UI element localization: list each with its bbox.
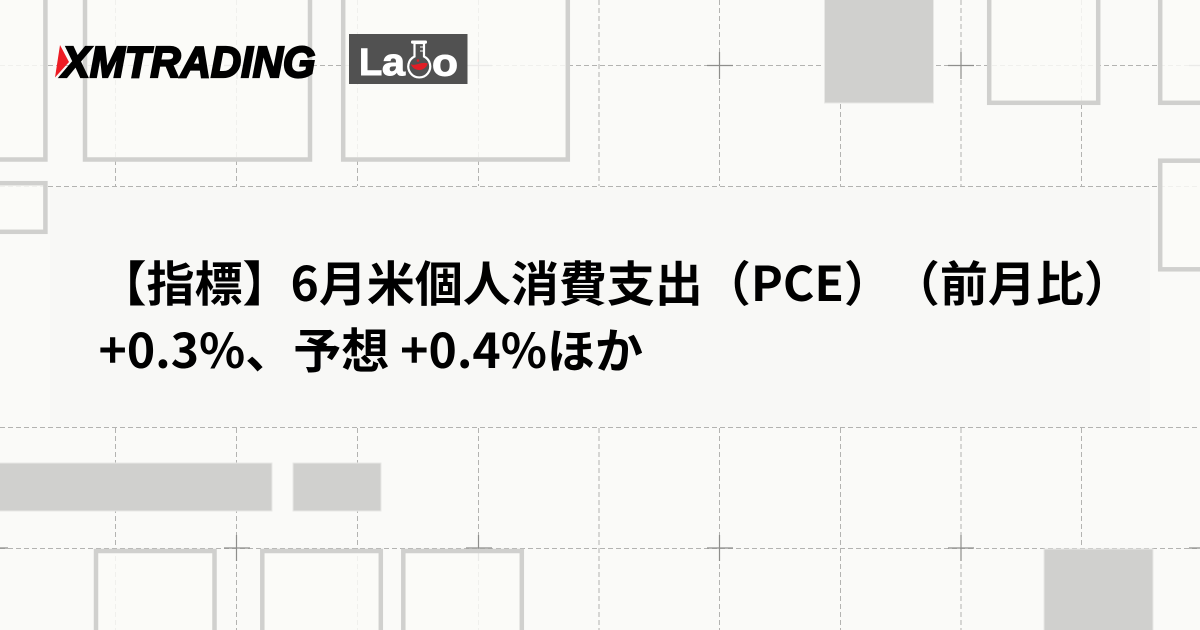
title: 【指標】6月米個人消費支出（PCE）（前月比） — [98, 245, 1132, 315]
logo letters: o — [432, 42, 458, 84]
logo letters: L — [359, 42, 382, 84]
icon: flask — [408, 40, 430, 77]
title backing panel — [50, 187, 1150, 427]
title: +0.3%、予想 +0.4%ほか — [98, 312, 643, 382]
logo letters — [359, 42, 458, 84]
icon: red arrow — [55, 45, 69, 78]
logo letters: a — [382, 42, 406, 84]
title — [98, 245, 1132, 382]
XMTRADING logo — [55, 38, 316, 84]
Labo logo — [349, 34, 468, 84]
